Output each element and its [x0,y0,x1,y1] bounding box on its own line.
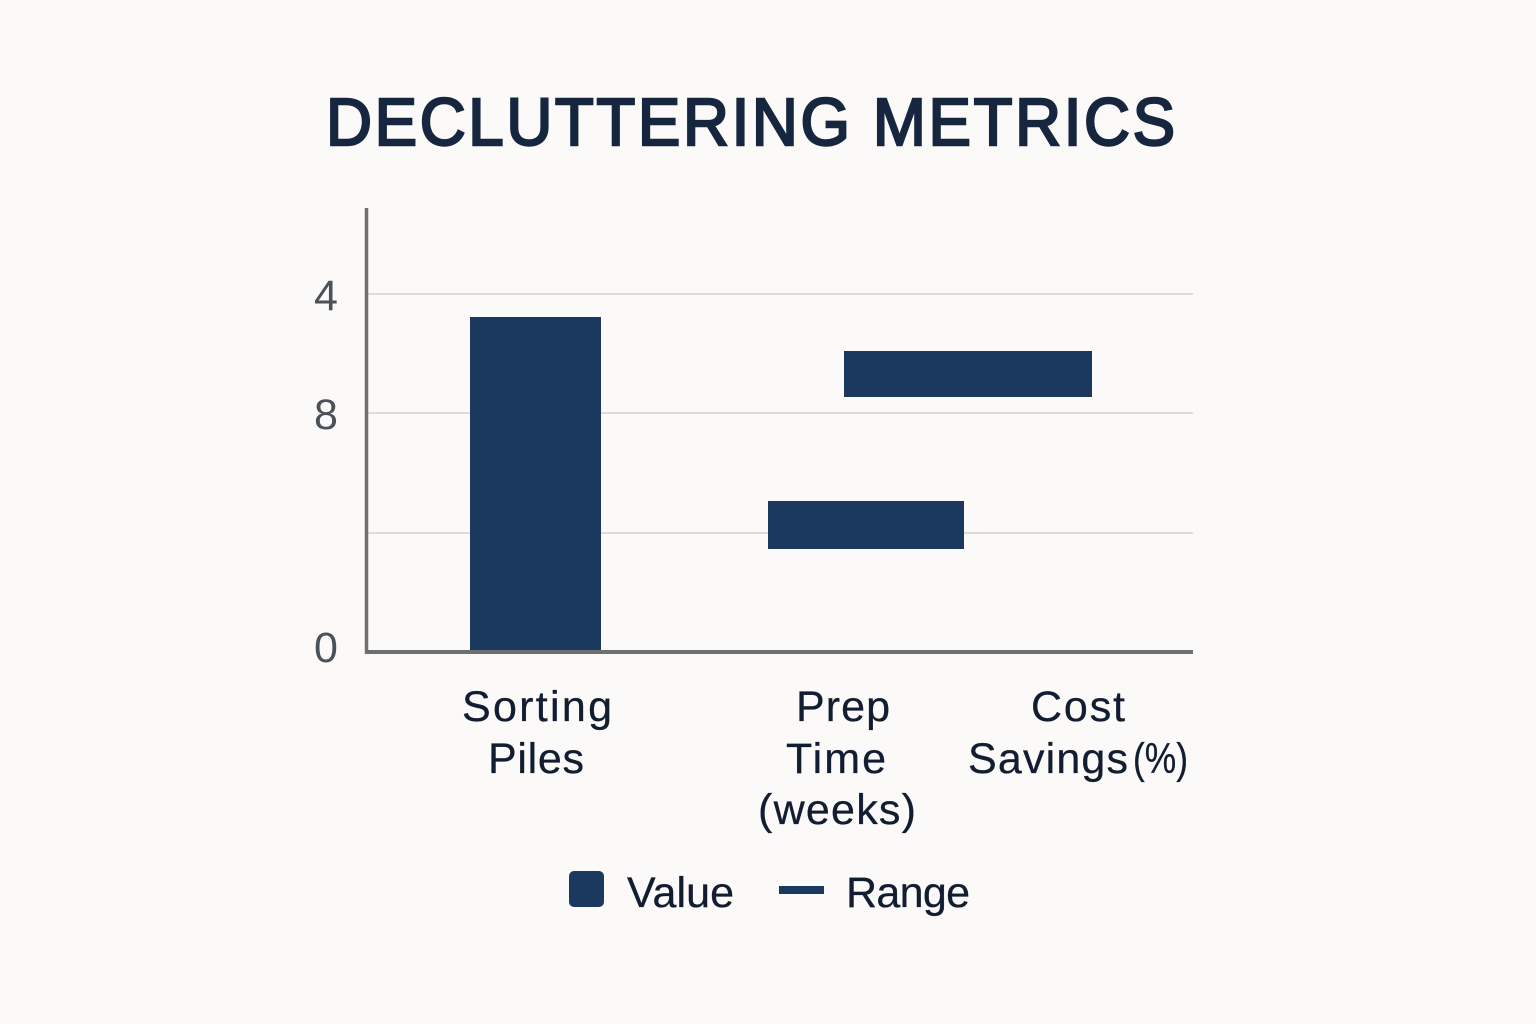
title: DECLUTTERING METRICS [326,85,1175,159]
range bar: prep time [768,501,964,549]
x axis labels: Piles [488,735,584,783]
legend swatch: range [779,886,824,894]
x axis labels: (weeks) [758,786,916,834]
legend label: value: Value [627,869,734,917]
y axis [365,208,368,654]
x axis labels: Savings [968,735,1128,783]
x axis labels: Prep [796,683,890,731]
x axis labels [462,683,1188,834]
y axis labels: 0 [314,624,338,672]
legend [569,869,970,917]
range bar: cost savings [844,351,1092,397]
y axis labels [314,272,338,672]
x axis labels: Sorting [462,683,612,731]
x axis labels: Cost [1031,683,1125,731]
y axis labels: 8 [314,391,338,439]
legend swatch: value [569,871,604,907]
chart [314,208,1193,834]
x axis labels: Time [786,735,886,783]
legend label: range: Range [846,869,970,917]
x axis [365,650,1193,654]
x axis labels: (%) [1133,735,1188,783]
bar: sorting piles [470,317,601,651]
y axis labels: 4 [314,272,338,320]
